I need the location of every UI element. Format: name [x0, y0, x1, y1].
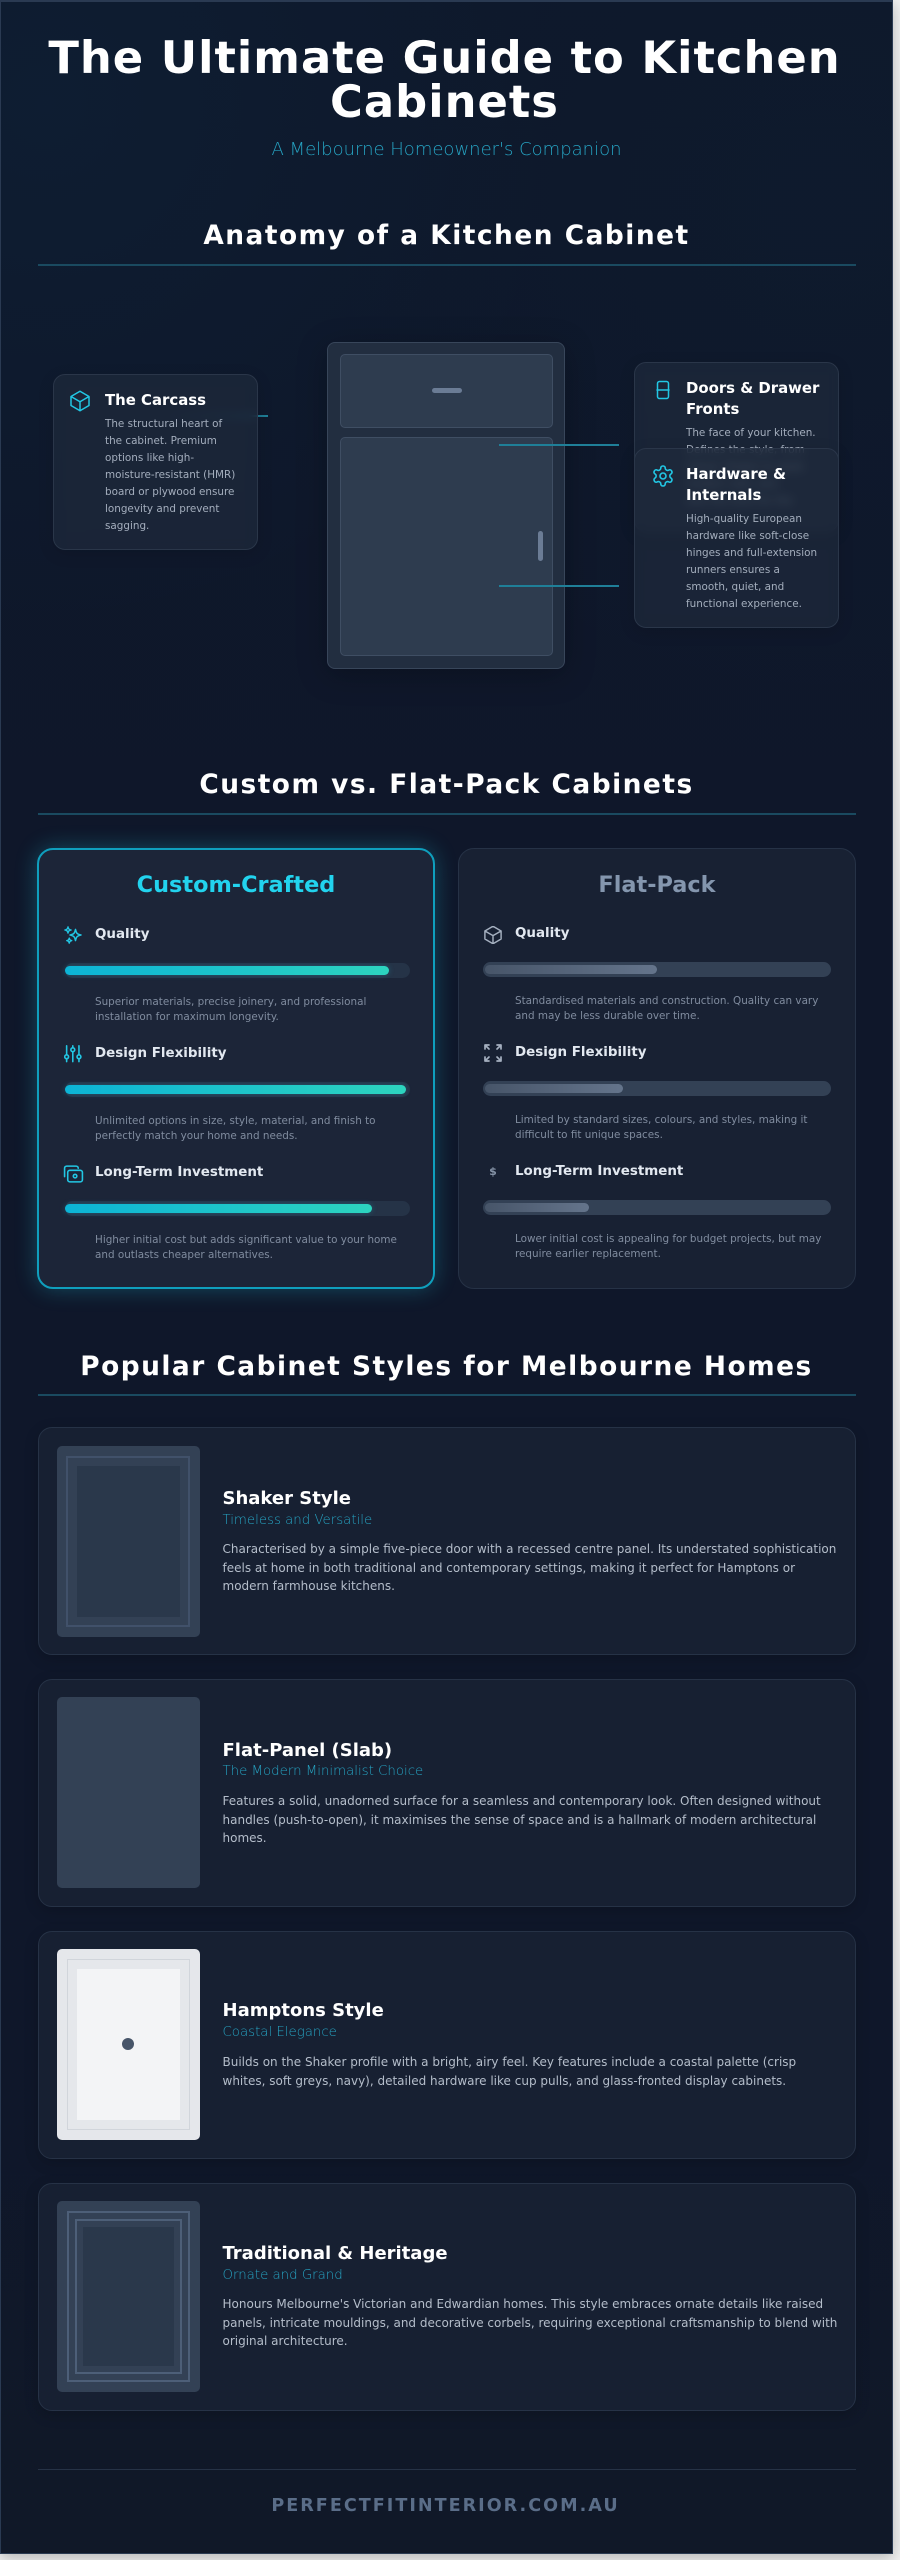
slab text: Features a solid, unadorned surface for a seamless and contemporary look. Often designed without — [222, 1794, 821, 1808]
description: and may be less durable over time. — [515, 1010, 700, 1022]
custom: long-term investment — [64, 1164, 410, 1260]
custom heading: Custom-Crafted — [137, 872, 335, 898]
carcass text: moisture-resistant (HMR) — [105, 469, 235, 481]
description: perfectly match your home and needs. — [95, 1130, 298, 1142]
flat-pack: quality — [483, 926, 831, 1022]
description: Standardised materials and construction. Quality can vary — [515, 995, 818, 1007]
slab text: handles (push-to-open), it maximises the sense of space and is a hallmark of modern architectural — [222, 1812, 816, 1826]
shaker text — [222, 1542, 836, 1593]
carcass text: board or plywood ensure — [105, 486, 234, 498]
heading: anatomy: Anatomy of a Kitchen Cabinet — [203, 220, 690, 251]
hardware text: High-quality European — [686, 513, 802, 525]
traditional tagline: Ornate and Grand — [222, 2268, 343, 2283]
description — [95, 1114, 376, 1142]
panel: doors and drawer fronts — [634, 362, 839, 532]
description: Higher initial cost but adds significant value to your home — [95, 1234, 397, 1246]
slab heading: Flat-Panel (Slab) — [222, 1740, 392, 1761]
description: Superior materials, precise joinery, and professional — [95, 996, 366, 1008]
traditional heading: Traditional & Heritage — [222, 2243, 448, 2264]
description — [515, 1114, 808, 1141]
panel: custom-crafted — [37, 848, 435, 1289]
flat-pack heading: Flat-Pack — [598, 872, 716, 898]
doors text: classic Shaker to sleek — [686, 461, 804, 473]
panel: traditional — [38, 2183, 856, 2411]
score bar — [65, 1201, 410, 1216]
icon: cube — [70, 390, 90, 412]
slab tagline: The Modern Minimalist Choice — [222, 1764, 423, 1779]
description: Lower initial cost is appealing for budget projects, but may — [515, 1233, 821, 1245]
doors text: The face of your kitchen. — [686, 427, 816, 439]
custom: quality — [64, 926, 410, 1022]
hardware text: hinges and full-extension — [686, 547, 817, 559]
score bar — [65, 1082, 410, 1097]
icon: arrows in — [484, 1044, 502, 1062]
icon: banknotes — [64, 1165, 84, 1183]
slab text: homes. — [222, 1831, 267, 1845]
hamptons text: whites, soft greys, navy), detailed hardware like cup pulls, and glass-fronted display cabinets. — [222, 2074, 786, 2088]
label: Design Flexibility — [95, 1046, 227, 1060]
carcass text: the cabinet. Premium — [105, 435, 217, 447]
traditional inner moulding — [74, 2219, 182, 2374]
label: Long-Term Investment — [95, 1164, 263, 1180]
cabinet diagram — [327, 342, 565, 669]
description: Unlimited options in size, style, material, and finish to — [95, 1114, 376, 1126]
hamptons frame — [66, 1959, 190, 2130]
doors heading — [686, 379, 820, 418]
hardware text: smooth, quiet, and — [686, 581, 784, 593]
description: installation for maximum longevity. — [95, 1010, 279, 1022]
doors heading: Doors & Drawer — [686, 379, 819, 397]
hardware text: functional experience. — [686, 598, 802, 610]
drawer handle — [432, 388, 462, 393]
door: slab — [56, 1697, 200, 1888]
label: Quality — [95, 926, 149, 942]
shaker tagline: Timeless and Versatile — [222, 1513, 372, 1528]
heading: comparison: Custom vs. Flat-Pack Cabinets — [199, 769, 694, 800]
drawer front — [340, 354, 553, 428]
traditional text: panels, intricate mouldings, and decorative corbels, requiring exceptional craftsmanship to blend with — [222, 2316, 837, 2330]
subtitle: A Melbourne Homeowner's Companion — [272, 139, 622, 160]
panel: flat-pack — [458, 848, 856, 1289]
description — [515, 995, 818, 1022]
label: Long-Term Investment — [515, 1164, 683, 1178]
traditional raised panel — [82, 2227, 174, 2366]
panel: hardware and internals — [634, 448, 839, 628]
shaker heading: Shaker Style — [222, 1488, 351, 1509]
doors heading: Fronts — [686, 400, 739, 418]
door front — [340, 437, 553, 656]
description: require earlier replacement. — [515, 1248, 661, 1260]
panel: the carcass — [53, 374, 258, 550]
hardware heading: Internals — [686, 486, 761, 504]
icon: box — [484, 926, 502, 944]
hamptons tagline: Coastal Elegance — [222, 2025, 337, 2040]
hamptons panel — [76, 1969, 180, 2120]
door handle — [538, 531, 543, 561]
panel: hamptons — [38, 1931, 856, 2159]
description: Limited by standard sizes, colours, and styles, making it — [515, 1114, 807, 1126]
score bar — [483, 1081, 831, 1096]
score bar — [65, 963, 410, 978]
footer: PERFECTFITINTERIOR.COM.AU — [271, 2496, 620, 2516]
description — [515, 1233, 821, 1260]
hardware text: runners ensures a — [686, 564, 780, 576]
connector line: hardware — [499, 585, 619, 587]
doors text: modern slab, and — [686, 478, 777, 490]
label: Design Flexibility — [515, 1044, 647, 1060]
description: and outlasts cheaper alternatives. — [95, 1248, 273, 1260]
doors text — [686, 427, 816, 507]
score bar — [483, 962, 831, 977]
description — [95, 1234, 397, 1260]
panel: shaker style — [38, 1427, 856, 1655]
connector line: doors — [499, 444, 619, 446]
traditional text: Honours Melbourne's Victorian and Edwardian homes. This style embraces ornate details like raised — [222, 2297, 823, 2311]
icon: sparkles — [64, 926, 82, 944]
icon: dollar: $ — [489, 1165, 497, 1178]
traditional text — [222, 2297, 837, 2348]
title — [48, 31, 841, 128]
hamptons text: Builds on the Shaker profile with a bright, airy feel. Key features include a coastal palette (crisp — [222, 2055, 796, 2069]
carcass text: sagging. — [105, 520, 149, 532]
description — [95, 996, 366, 1022]
hamptons text — [222, 2055, 796, 2088]
door: shaker — [56, 1446, 200, 1637]
title: The Ultimate Guide to Kitchen — [48, 31, 841, 84]
carcass heading: The Carcass — [105, 391, 206, 409]
hamptons knob — [122, 2038, 134, 2050]
connector line: carcass — [166, 415, 268, 417]
shaker text: feels at home in both traditional and contemporary settings, making it perfect for Hamptons or — [222, 1560, 795, 1574]
carcass text: options like high- — [105, 452, 194, 464]
icon: gear — [653, 465, 673, 487]
slab text — [222, 1794, 821, 1845]
icon: sliders — [64, 1045, 82, 1062]
shaker text: modern farmhouse kitchens. — [222, 1579, 395, 1593]
hamptons heading: Hamptons Style — [222, 2000, 384, 2021]
shaker recessed panel — [76, 1466, 180, 1617]
flat-pack: design flexibility — [483, 1044, 831, 1141]
hardware heading — [686, 465, 786, 504]
hardware text — [686, 513, 817, 610]
door: traditional — [56, 2201, 200, 2392]
icon: door and drawer — [656, 380, 670, 400]
doors text: sets the tone for the — [686, 495, 792, 507]
score bar — [483, 1200, 831, 1215]
shaker frame — [66, 1456, 190, 1627]
panel: flat-panel — [38, 1679, 856, 1907]
description: difficult to fit unique spaces. — [515, 1129, 663, 1141]
carcass text — [104, 418, 235, 532]
hardware heading: Hardware & — [686, 465, 786, 483]
traditional text: original architecture. — [222, 2334, 348, 2348]
title: Cabinets — [330, 75, 559, 128]
carcass text: The structural heart of — [105, 418, 222, 430]
doors text: Defines the style, from — [686, 444, 805, 456]
traditional outer moulding — [66, 2211, 190, 2382]
flat-pack: long-term investment — [483, 1164, 831, 1260]
carcass text: longevity and prevent — [105, 503, 219, 515]
label: Quality — [515, 926, 569, 940]
custom: design flexibility — [64, 1045, 410, 1142]
door: hamptons — [56, 1949, 200, 2140]
hardware text: hardware like soft-close — [686, 530, 809, 542]
heading: styles: Popular Cabinet Styles for Melbourne Homes — [80, 1351, 813, 1382]
shaker text: Characterised by a simple five-piece door with a recessed centre panel. Its understated sophistication — [222, 1542, 836, 1556]
